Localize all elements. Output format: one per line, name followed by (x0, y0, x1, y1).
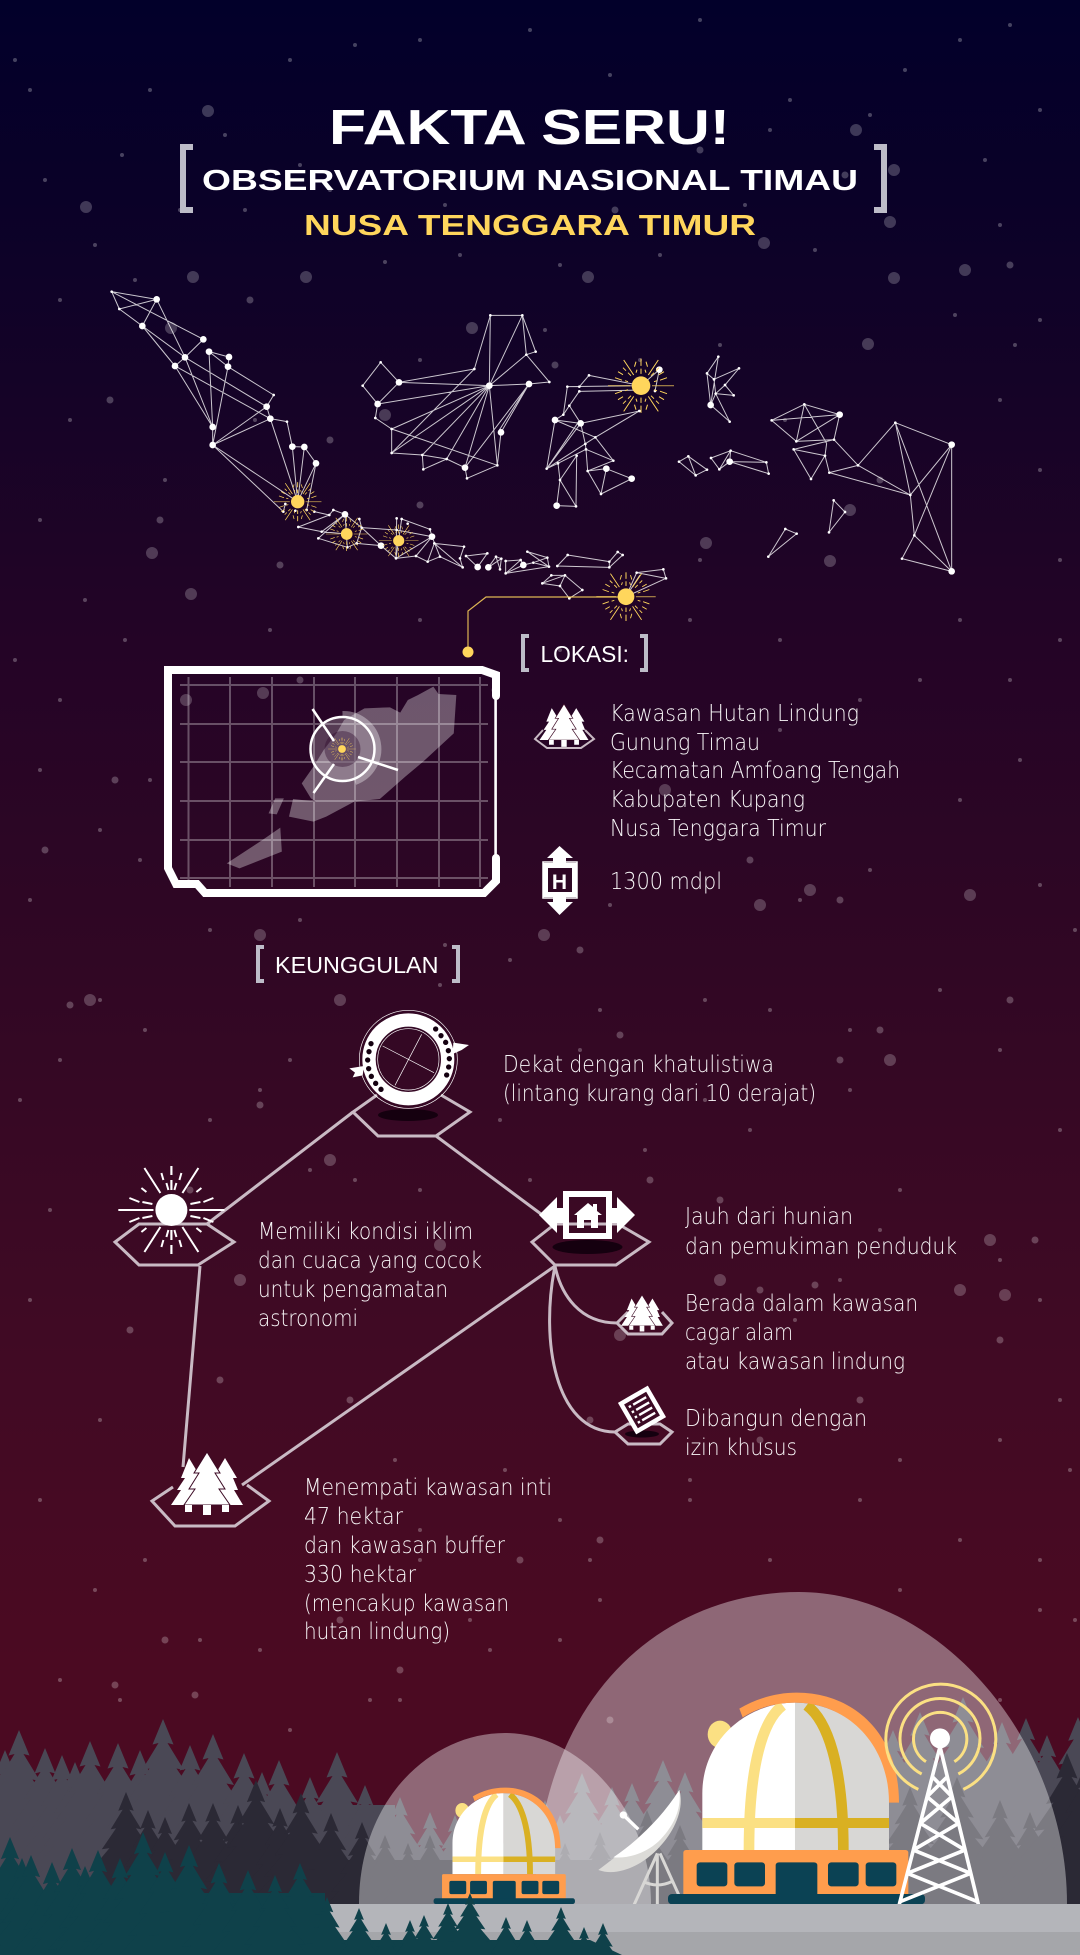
advantage: climate and weather (115, 1166, 234, 1265)
text: near the equator: (lintang kurang dari 10 derajat) (503, 1081, 816, 1107)
text: core and buffer zone: dan kawasan buffer (304, 1533, 505, 1559)
heading: lokasi: LOKASI: (540, 641, 629, 667)
hexagon base (115, 1224, 234, 1265)
target reticle (310, 709, 398, 793)
shadow (552, 1240, 622, 1254)
text: near the equator: Dekat dengan khatulistiwa (503, 1052, 774, 1078)
map frame (168, 670, 497, 893)
heading: lokasi (523, 636, 646, 670)
icon: document (621, 1389, 663, 1431)
eastern islands (542, 357, 952, 598)
sun: Sumatra site (274, 482, 321, 521)
icon: house with arrows (539, 1194, 635, 1236)
heading: keunggulan (258, 947, 458, 981)
advantage: special permit (615, 1389, 672, 1444)
small observatory (434, 1788, 575, 1904)
location forest icon (535, 704, 594, 748)
subtitle brackets (183, 147, 884, 210)
glow dome: large (535, 1592, 1067, 1904)
text: far from settlements (685, 1204, 957, 1260)
location address text: Nusa Tenggara Timur (610, 816, 826, 842)
region subtitle: NUSA TENGGARA TIMUR (304, 210, 756, 242)
connecting lines between advantages (183, 1112, 617, 1485)
altitude text: 1300 mdpl (610, 869, 722, 895)
heading: fakta seru: FAKTA SERU! (329, 101, 730, 155)
hexagon base (353, 1095, 470, 1136)
text: core and buffer zone (304, 1475, 552, 1645)
text: climate and weather: untuk pengamatan (258, 1277, 448, 1303)
location address text: Gunung Timau (610, 730, 760, 756)
hexagon base (615, 1424, 672, 1444)
location address text: Kabupaten Kupang (610, 787, 805, 813)
dark forest layer (75, 1753, 1080, 1923)
text: core and buffer zone: hutan lindung) (304, 1619, 450, 1645)
ground (0, 1904, 1080, 1955)
landscape scene (0, 1592, 1080, 1955)
map grid (180, 677, 488, 887)
location address text: Kawasan Hutan Lindung (610, 701, 859, 727)
text: climate and weather: astronomi (258, 1306, 358, 1332)
text: core and buffer zone: 330 hektar (304, 1562, 416, 1588)
icon: altitude: H (552, 871, 567, 894)
text: protected area: Berada dalam kawasan (685, 1291, 918, 1317)
icon: sun (118, 1166, 224, 1254)
constellation map of Indonesia (112, 292, 952, 621)
sun: West Java site (326, 517, 367, 551)
text: core and buffer zone: (mencakup kawasan (304, 1591, 509, 1617)
text: climate and weather: dan cuaca yang cocok (258, 1248, 482, 1274)
heading: keunggulan: KEUNGGULAN (275, 952, 438, 978)
advantage: near the equator (349, 1010, 470, 1136)
island silhouette (227, 687, 456, 868)
text: special permit (685, 1406, 867, 1461)
icon: large forest (171, 1452, 243, 1515)
hexagon base (617, 1312, 672, 1334)
subtitle: OBSERVATORIUM NASIONAL TIMAU (202, 165, 858, 197)
hexagon base (532, 1224, 649, 1265)
location address text (610, 701, 900, 842)
location address text: Kecamatan Amfoang Tengah (610, 758, 900, 784)
far forest layer (0, 1697, 1080, 1915)
shadow (625, 1430, 659, 1438)
glow dome: small (359, 1733, 651, 1904)
text: far from settlements: dan pemukiman penduduk (685, 1234, 957, 1260)
sun: Sulawesi site (608, 359, 674, 413)
hexagon base (152, 1485, 269, 1526)
radio tower with signal rings (886, 1684, 996, 1904)
advantage: core and buffer zone (152, 1452, 269, 1526)
leader line from Timor to locator map (462, 597, 626, 658)
text: protected area: cagar alam (685, 1320, 793, 1346)
icon: small forest (621, 1295, 663, 1332)
advantage: far from settlements (532, 1194, 649, 1265)
icon: altitude (543, 846, 577, 915)
text: core and buffer zone: 47 hektar (304, 1504, 403, 1530)
text: climate and weather: Memiliki kondisi iklim (258, 1219, 473, 1245)
title (183, 101, 884, 242)
sun: East Java site (379, 524, 418, 557)
sun: Timor site (596, 572, 656, 621)
icon: globe ring (349, 1010, 469, 1108)
shadow (378, 1109, 438, 1121)
text: core and buffer zone: Menempati kawasan inti (304, 1475, 552, 1501)
text: special permit: Dibangun dengan (685, 1406, 867, 1432)
western islands (112, 292, 549, 573)
text: near the equator (503, 1052, 816, 1107)
text: protected area: atau kawasan lindung (685, 1349, 905, 1375)
advantage: protected area (617, 1295, 672, 1334)
satellite dish (598, 1790, 683, 1905)
panel: locator map (168, 670, 497, 893)
text: climate and weather (258, 1219, 482, 1332)
text: protected area (685, 1291, 918, 1375)
text: special permit: izin khusus (685, 1435, 797, 1461)
text: far from settlements: Jauh dari hunian (685, 1204, 853, 1230)
front forest layer (0, 1832, 635, 1955)
large observatory (668, 1693, 925, 1904)
